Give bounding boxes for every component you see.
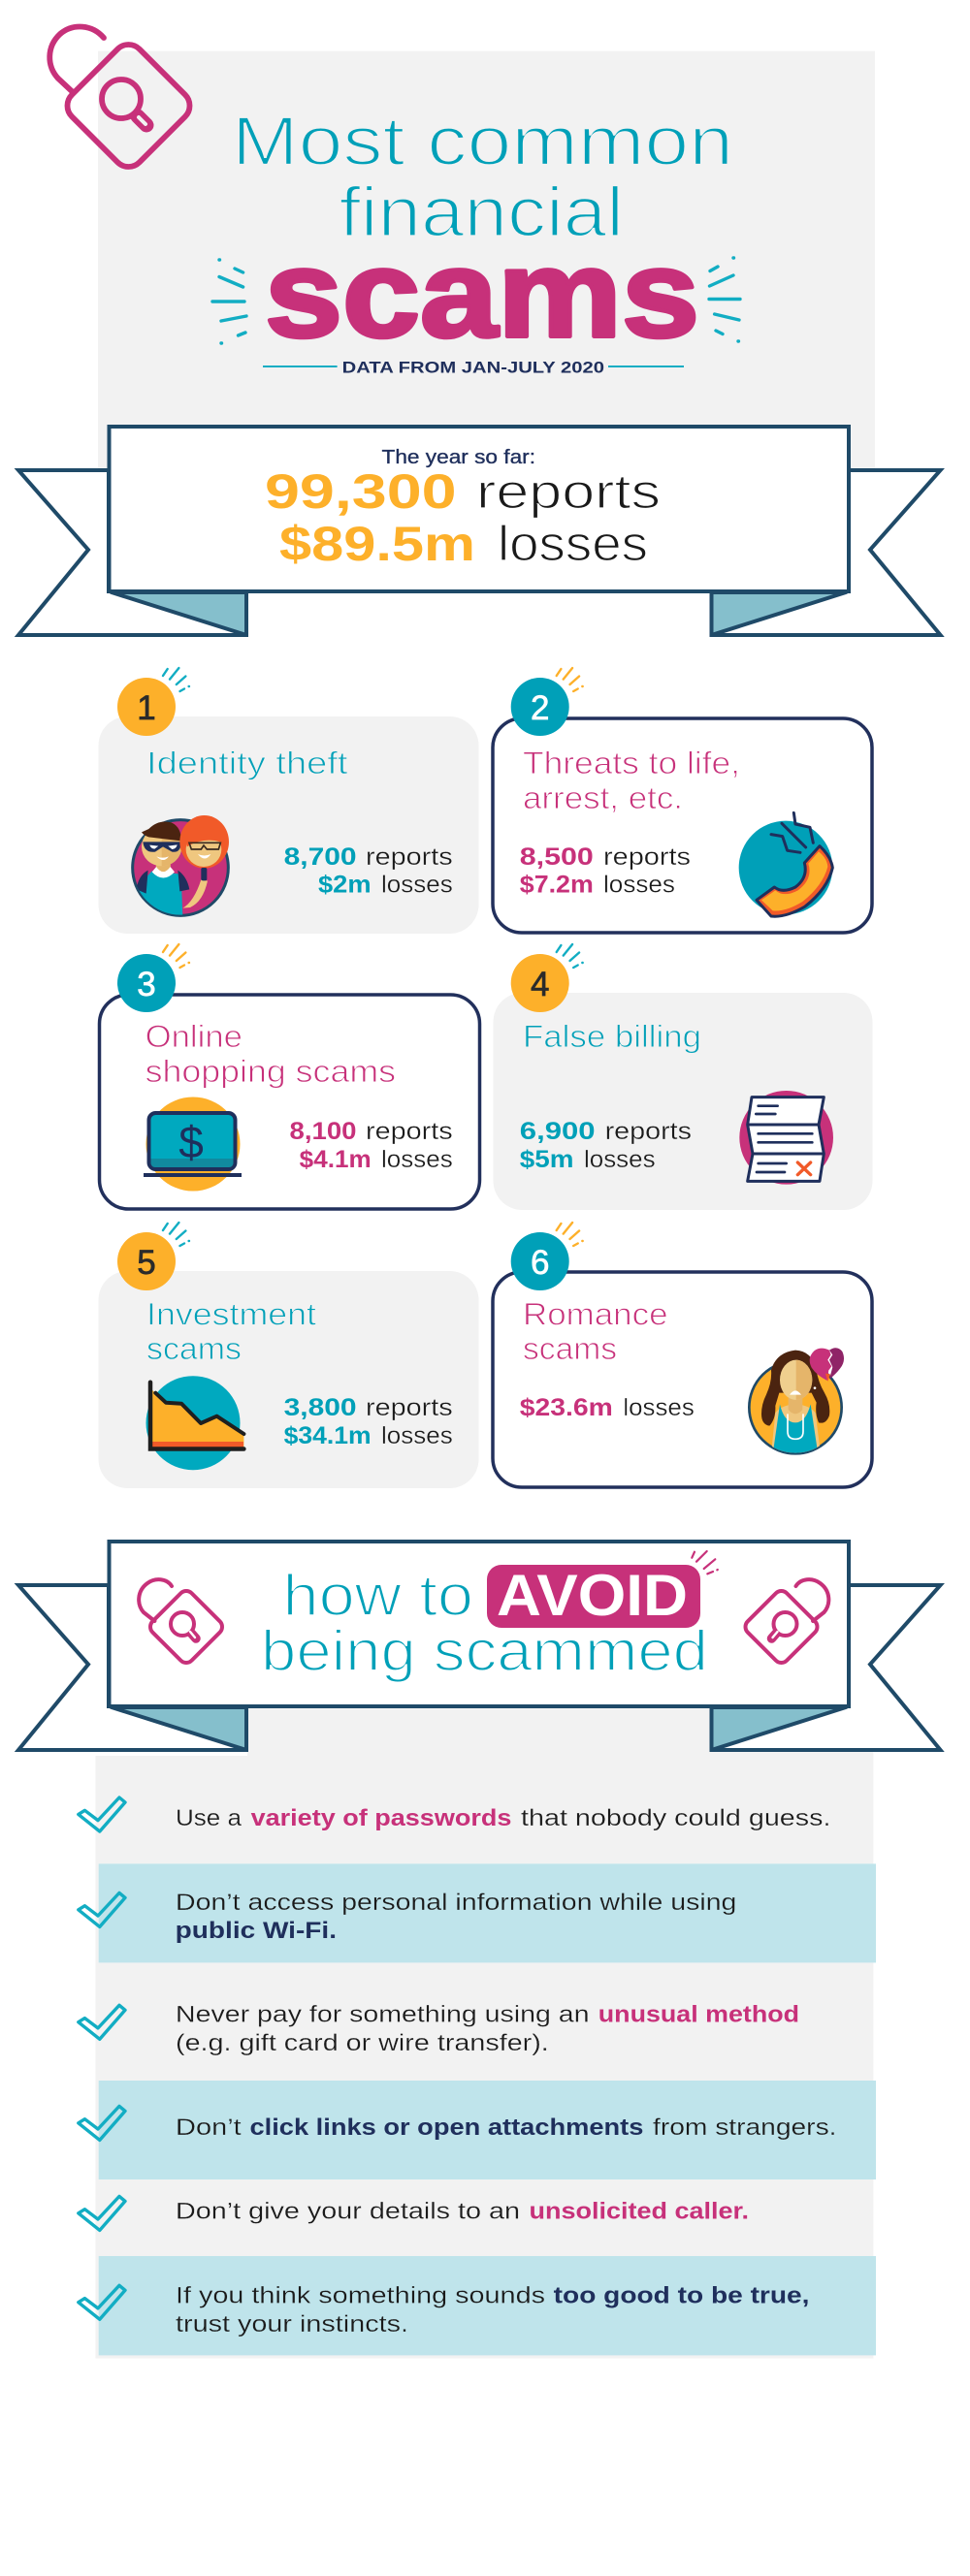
- stats: [284, 843, 453, 899]
- badge 5: 5: [137, 1244, 156, 1282]
- stats: 6,900: [520, 1118, 596, 1145]
- panel: header background: [98, 51, 875, 471]
- stats: $5m: [520, 1146, 574, 1173]
- panel: card 4 false billing: [493, 944, 873, 1210]
- ribbon: how to avoid being scammed: [18, 1542, 941, 1756]
- icon: two people: [133, 815, 229, 916]
- tip 6: too good to be true,: [554, 2282, 809, 2309]
- tip 4: from strangers.: [653, 2115, 836, 2141]
- heading: [523, 746, 740, 815]
- stats: losses: [623, 1394, 695, 1421]
- heading: how to avoid: [261, 1551, 718, 1683]
- tip 4: Don’t: [176, 2115, 242, 2141]
- title: [232, 104, 733, 364]
- band: tip 2 background: [99, 1863, 876, 1962]
- tip 3: (e.g. gift card or wire transfer).: [176, 2030, 549, 2056]
- badge 2: 2: [531, 689, 549, 727]
- heading: False billing: [523, 1019, 701, 1054]
- stats: [284, 1394, 453, 1449]
- subtitle: data period: DATA FROM JAN-JULY 2020: [342, 359, 604, 377]
- heading: arrest, etc.: [523, 780, 683, 815]
- tip 3: Never pay for something using an: [176, 2002, 590, 2028]
- heading: scams: [523, 1331, 617, 1366]
- title: Most common: [232, 104, 733, 180]
- tip 6: If you think something sounds: [176, 2282, 545, 2309]
- tip 6: [79, 2282, 810, 2337]
- stats: $2m: [318, 872, 372, 899]
- icon: padlock: [49, 27, 196, 174]
- stats: losses: [381, 1146, 453, 1173]
- tip 1: [79, 1797, 831, 1831]
- badge 6: [511, 1223, 583, 1290]
- panel: card 3 online shopping: [99, 944, 479, 1209]
- tip 4: [79, 2106, 837, 2141]
- stats: $7.2m: [520, 872, 594, 899]
- tip 1: Use a: [176, 1805, 242, 1831]
- text block: totals: $89.5m: [279, 517, 475, 571]
- stats: reports: [603, 843, 691, 871]
- text block: totals: [265, 447, 661, 571]
- tip 6: trust your instincts.: [176, 2311, 408, 2337]
- heading: how to avoid: AVOID: [497, 1563, 688, 1628]
- stats: losses: [381, 872, 453, 899]
- stats: [289, 1118, 453, 1173]
- ribbon: year so far: [18, 427, 941, 635]
- icon: falling chart: [146, 1376, 243, 1470]
- stats: [520, 843, 691, 899]
- stats: [520, 1394, 695, 1421]
- icon: laptop: [144, 1097, 242, 1191]
- heading: how to avoid: how to: [283, 1563, 473, 1628]
- badge 5: [117, 1223, 189, 1290]
- heading: [146, 1019, 396, 1089]
- stats: reports: [366, 843, 453, 871]
- stats: reports: [605, 1118, 692, 1145]
- text block: totals: reports: [476, 464, 661, 519]
- stats: $23.6m: [520, 1394, 613, 1421]
- band: tip 4 background: [99, 2081, 876, 2179]
- stats: losses: [381, 1422, 453, 1449]
- stats: 8,500: [520, 843, 594, 871]
- stats: 8,700: [284, 843, 357, 871]
- stats: 3,800: [284, 1394, 357, 1421]
- tip 1: that nobody could guess.: [521, 1805, 830, 1831]
- heading: Identity theft: [146, 746, 348, 780]
- tip 1: variety of passwords: [251, 1805, 511, 1831]
- stats: 8,100: [289, 1118, 357, 1145]
- tip 5: Don’t give your details to an: [176, 2199, 520, 2225]
- band: tip 6 background: [99, 2256, 876, 2355]
- tip 3: [79, 2002, 799, 2056]
- badge 2: [511, 668, 583, 736]
- tip 2: Don’t access personal information while using: [176, 1890, 736, 1916]
- panel: tips background: [95, 1706, 873, 2359]
- panel: card 2 threats: [493, 668, 872, 933]
- stats: [520, 1118, 692, 1173]
- badge 3: 3: [137, 966, 156, 1003]
- tip 5: unsolicited caller.: [530, 2199, 749, 2225]
- heading: Investment: [146, 1297, 316, 1332]
- heading: Romance: [523, 1297, 667, 1332]
- text block: totals: losses: [498, 516, 648, 571]
- icon: folded bill: [739, 1091, 833, 1185]
- panel: card 6 romance: [493, 1223, 872, 1487]
- badge 4: [511, 944, 583, 1012]
- badge 4: 4: [531, 966, 549, 1003]
- text block: totals: The year so far:: [382, 447, 535, 468]
- stats: reports: [366, 1394, 453, 1421]
- stats: $4.1m: [300, 1146, 372, 1173]
- heading: [146, 1297, 316, 1366]
- badge 3: [117, 944, 189, 1012]
- icon: phone: [739, 812, 832, 916]
- tip 2: [79, 1890, 736, 1944]
- badge 6: 6: [531, 1244, 549, 1282]
- heading: shopping scams: [146, 1054, 396, 1089]
- tip 2: public Wi-Fi.: [176, 1918, 337, 1944]
- tip 3: unusual method: [598, 2002, 799, 2028]
- heading: Threats to life,: [523, 746, 740, 780]
- panel: card 1 identity theft: [99, 668, 479, 934]
- title: financial: [340, 175, 624, 252]
- panel: card 5 investment: [99, 1223, 479, 1488]
- icon: padlock left: [139, 1579, 225, 1666]
- heading: how to avoid: being scammed: [261, 1619, 708, 1683]
- heading: Online: [146, 1019, 242, 1054]
- heading: scams: [146, 1331, 242, 1366]
- stats: reports: [366, 1118, 453, 1145]
- text block: totals: 99,300: [265, 464, 457, 519]
- stats: losses: [584, 1146, 656, 1173]
- stats: losses: [603, 872, 675, 899]
- tip 4: click links or open attachments: [250, 2115, 643, 2141]
- badge 1: 1: [137, 689, 156, 727]
- icon: padlock right: [742, 1579, 828, 1666]
- icon: laptop: $: [178, 1117, 204, 1167]
- badge 1: [117, 668, 189, 736]
- heading: [523, 1297, 667, 1366]
- title: scams: [265, 225, 699, 364]
- icon: woman with broken heart: [749, 1348, 844, 1454]
- icon: burst rays beside scams: [212, 258, 740, 343]
- tip 5: [79, 2196, 749, 2230]
- stats: $34.1m: [284, 1422, 372, 1449]
